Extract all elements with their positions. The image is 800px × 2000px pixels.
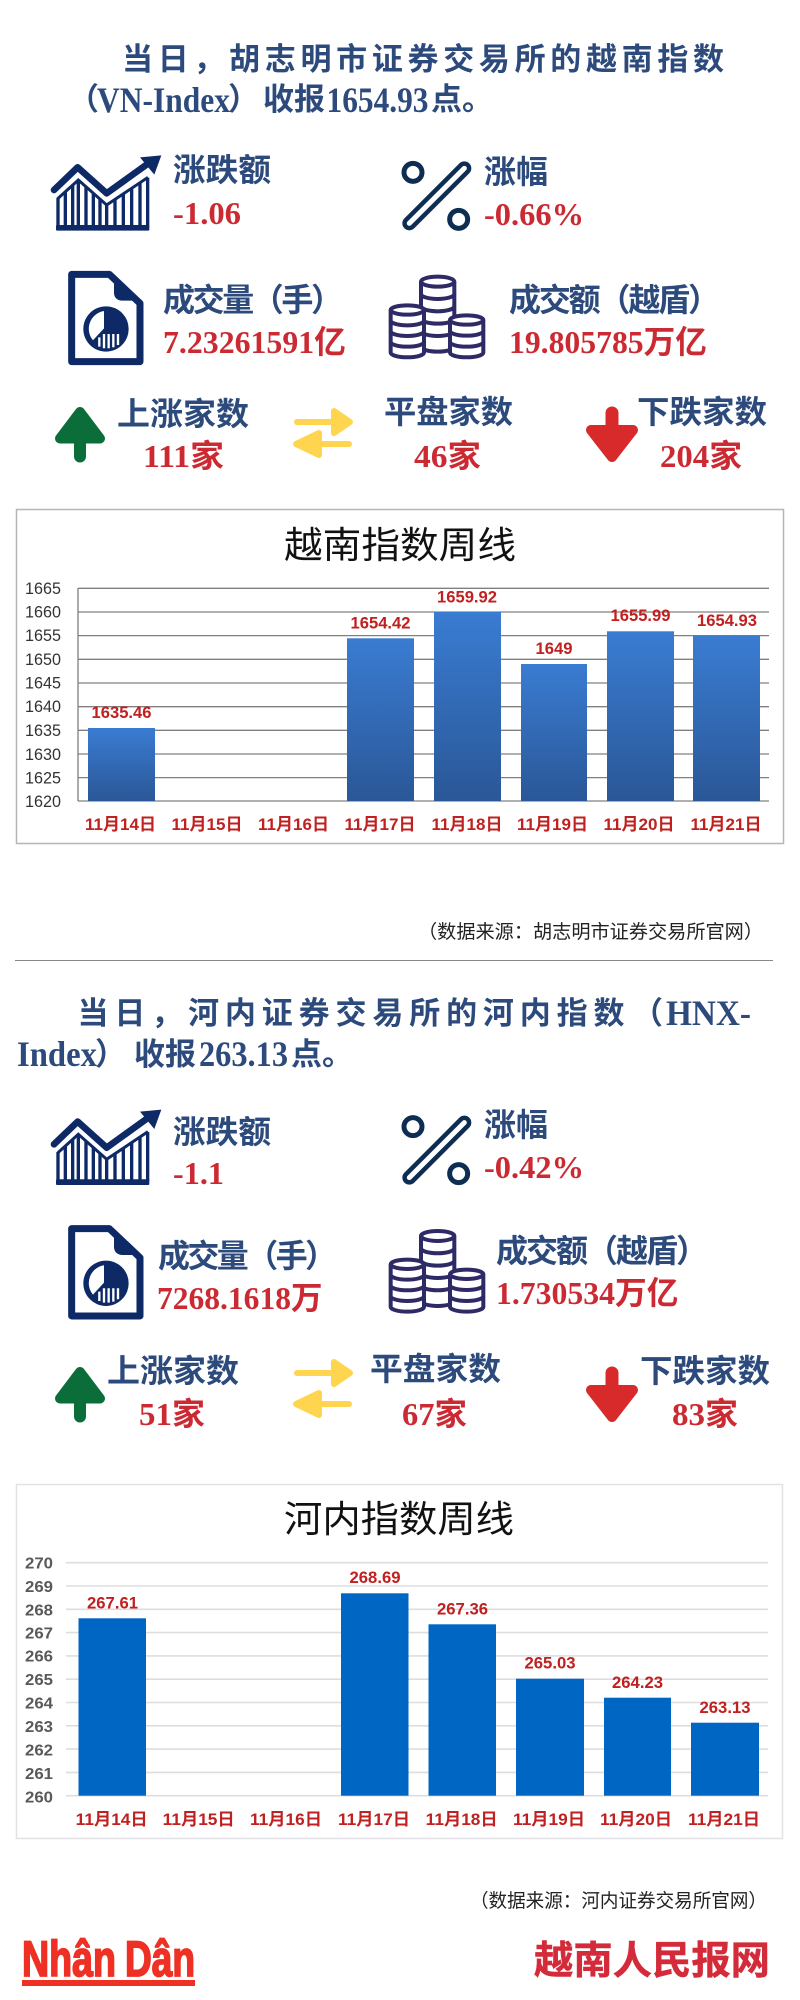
value: volume: 7268.1618万 bbox=[157, 1280, 322, 1316]
y axis labels: 1630 bbox=[25, 746, 61, 764]
y axis labels: 260 bbox=[25, 1790, 53, 1806]
value: volume: 7.23261591亿 bbox=[163, 324, 346, 360]
label: change amount: 涨跌额 bbox=[173, 1107, 271, 1153]
y axis labels: 1645 bbox=[25, 674, 61, 692]
y axis labels: 1650 bbox=[25, 651, 61, 669]
label: advancers: 上涨家数 bbox=[107, 1346, 239, 1392]
section: VN-Index bbox=[16, 34, 784, 944]
data labels: 268.69 bbox=[350, 1568, 400, 1587]
data labels: 1655.99 bbox=[610, 606, 670, 625]
x axis labels: 11月16日 bbox=[250, 1810, 322, 1829]
heading: HNX-Index: 收报 bbox=[134, 1029, 196, 1074]
icon: down arrow bbox=[591, 1367, 633, 1417]
x axis labels: 11月19日 bbox=[517, 815, 588, 834]
data labels: 267.61 bbox=[87, 1594, 138, 1612]
y axis labels: 270 bbox=[25, 1556, 53, 1572]
data labels: 1654.42 bbox=[350, 614, 410, 632]
data labels: 1659.92 bbox=[437, 588, 497, 606]
y axis labels: 1620 bbox=[25, 793, 61, 811]
heading: VN-Index bbox=[68, 34, 724, 120]
heading: HNX-Index: 当日，河内证券交易所的河内指数 bbox=[78, 988, 624, 1033]
data labels bbox=[92, 588, 757, 722]
value: turnover: 19.805785万亿 bbox=[509, 324, 707, 360]
label: change percent: 涨幅 bbox=[484, 1100, 548, 1146]
bars bbox=[88, 612, 760, 801]
x axis labels: 11月15日 bbox=[172, 815, 242, 834]
x axis labels: 11月20日 bbox=[604, 815, 674, 834]
heading: HNX-Index: 点。 bbox=[291, 1029, 353, 1074]
x axis labels: 11月21日 bbox=[688, 1810, 760, 1829]
icon: percent bbox=[404, 1118, 468, 1183]
y axis labels: 266 bbox=[25, 1648, 53, 1666]
y axis labels: 1665 bbox=[25, 580, 61, 598]
heading: VN-Index: （ bbox=[68, 74, 99, 119]
label: turnover: 成交额（越盾） bbox=[496, 1226, 708, 1272]
x axis labels: 11月14日 bbox=[76, 1810, 148, 1829]
icon: coin stacks bbox=[391, 277, 483, 357]
y axis labels: 267 bbox=[25, 1626, 53, 1642]
label: unchanged: 平盘家数 bbox=[370, 1344, 501, 1390]
section: HNX-Index bbox=[16, 988, 782, 1913]
icon: percent bbox=[404, 163, 468, 228]
data labels: 1654.93 bbox=[697, 611, 757, 630]
x axis labels bbox=[85, 815, 762, 834]
source note: VN-Index: （数据来源：胡志明市证券交易所官网） bbox=[418, 917, 763, 944]
data labels: 264.23 bbox=[612, 1673, 663, 1692]
heading: HNX-Index: Index bbox=[17, 1034, 97, 1074]
heading: VN-Index: 当日，胡志明市证券交易所的越南指数 bbox=[122, 34, 724, 79]
y axis labels: 264 bbox=[25, 1696, 53, 1712]
value: unchanged: 67家 bbox=[402, 1396, 467, 1432]
heading: HNX-Index: （ bbox=[632, 988, 663, 1033]
value: turnover: 1.730534万亿 bbox=[496, 1275, 678, 1311]
x axis labels: 11月14日 bbox=[85, 815, 156, 834]
y axis labels: 1655 bbox=[25, 627, 61, 645]
logo: Nhan Dan: Dân bbox=[125, 1931, 195, 1987]
value: unchanged: 46家 bbox=[414, 438, 481, 474]
label: advancers: 上涨家数 bbox=[117, 389, 249, 435]
data labels: 267.36 bbox=[437, 1600, 488, 1618]
x axis labels: 11月15日 bbox=[163, 1810, 235, 1829]
value: change percent: -0.42% bbox=[484, 1149, 584, 1185]
source note: HNX-Index: （数据来源：河内证券交易所官网） bbox=[470, 1886, 767, 1913]
icon: rising chart bbox=[54, 155, 161, 231]
x axis labels: 11月18日 bbox=[432, 815, 502, 834]
label: decliners: 下跌家数 bbox=[637, 387, 767, 433]
y axis labels: 268 bbox=[25, 1602, 53, 1620]
x axis labels: 11月17日 bbox=[344, 815, 416, 834]
y axis labels: 1640 bbox=[25, 698, 61, 716]
logo: Nhan Dan: Nhân bbox=[22, 1931, 116, 1987]
x axis labels: 11月16日 bbox=[258, 815, 329, 834]
x axis labels: 11月21日 bbox=[690, 815, 762, 834]
icon: up arrow bbox=[60, 1372, 100, 1422]
label: decliners: 下跌家数 bbox=[640, 1346, 770, 1392]
chart panel: VN-Index weekly bbox=[16, 510, 784, 844]
label: change amount: 涨跌额 bbox=[173, 145, 271, 191]
brand name: Vietnam People's Daily: 越南人民报网 bbox=[534, 1930, 770, 1986]
chart panel: HNX-Index weekly bbox=[16, 1484, 782, 1838]
icon: down arrow bbox=[591, 407, 633, 457]
y axis labels: 1660 bbox=[25, 604, 61, 622]
y axis labels: 262 bbox=[25, 1742, 53, 1760]
icon: up arrow bbox=[60, 412, 100, 462]
heading: HNX-Index: HNX- bbox=[666, 993, 751, 1033]
icon: rising chart bbox=[54, 1110, 161, 1185]
x axis labels: 11月20日 bbox=[600, 1810, 672, 1829]
bars bbox=[78, 1593, 759, 1796]
data labels: 265.03 bbox=[524, 1654, 576, 1672]
gridlines bbox=[78, 588, 769, 801]
heading: VN-Index: 1654.93 bbox=[326, 80, 428, 120]
x axis labels: 11月17日 bbox=[338, 1810, 410, 1829]
data labels: 263.13 bbox=[700, 1698, 750, 1717]
value: change amount: -1.1 bbox=[173, 1155, 224, 1191]
value: advancers: 111家 bbox=[143, 438, 224, 474]
heading: HNX-Index: ） bbox=[95, 1029, 126, 1074]
label: unchanged: 平盘家数 bbox=[384, 387, 513, 433]
data labels: 1635.46 bbox=[92, 703, 152, 722]
chart title: 越南指数周线 bbox=[284, 515, 516, 569]
y axis labels: 269 bbox=[25, 1579, 53, 1596]
gridlines bbox=[66, 1563, 768, 1796]
x axis labels: 11月18日 bbox=[426, 1810, 498, 1829]
y axis labels: 1625 bbox=[25, 770, 61, 788]
icon: coin stacks bbox=[391, 1231, 483, 1312]
data labels: 1649 bbox=[536, 639, 572, 658]
icon: document with pie chart bbox=[72, 274, 140, 362]
y axis labels bbox=[25, 580, 61, 811]
y axis labels: 263 bbox=[25, 1719, 53, 1736]
value: decliners: 204家 bbox=[660, 438, 742, 474]
icon: document with pie chart bbox=[72, 1229, 140, 1316]
value: decliners: 83家 bbox=[672, 1396, 738, 1432]
label: change percent: 涨幅 bbox=[484, 147, 548, 193]
heading: VN-Index: VN-Index bbox=[97, 80, 230, 120]
value: change percent: -0.66% bbox=[484, 196, 584, 232]
value: advancers: 51家 bbox=[139, 1396, 205, 1432]
icon: exchange arrows bbox=[296, 1362, 350, 1415]
y axis labels bbox=[25, 1556, 53, 1806]
label: volume: 成交量（手） bbox=[163, 275, 343, 321]
heading: HNX-Index bbox=[17, 988, 751, 1074]
icon: exchange arrows bbox=[296, 411, 350, 455]
value: change amount: -1.06 bbox=[173, 195, 241, 231]
data labels bbox=[87, 1568, 750, 1717]
heading: VN-Index: 收报 bbox=[263, 74, 325, 119]
heading: HNX-Index: 263.13 bbox=[199, 1034, 288, 1074]
x axis labels: 11月19日 bbox=[513, 1810, 585, 1829]
chart title: 河内指数周线 bbox=[284, 1489, 514, 1543]
y axis labels: 1635 bbox=[25, 722, 61, 740]
heading: VN-Index: ） bbox=[228, 74, 259, 119]
x axis labels bbox=[76, 1810, 760, 1829]
y axis labels: 265 bbox=[25, 1672, 53, 1689]
heading: VN-Index: 点。 bbox=[431, 74, 493, 119]
label: turnover: 成交额（越盾） bbox=[509, 275, 720, 321]
label: volume: 成交量（手） bbox=[158, 1231, 337, 1277]
y axis labels: 261 bbox=[25, 1766, 53, 1783]
